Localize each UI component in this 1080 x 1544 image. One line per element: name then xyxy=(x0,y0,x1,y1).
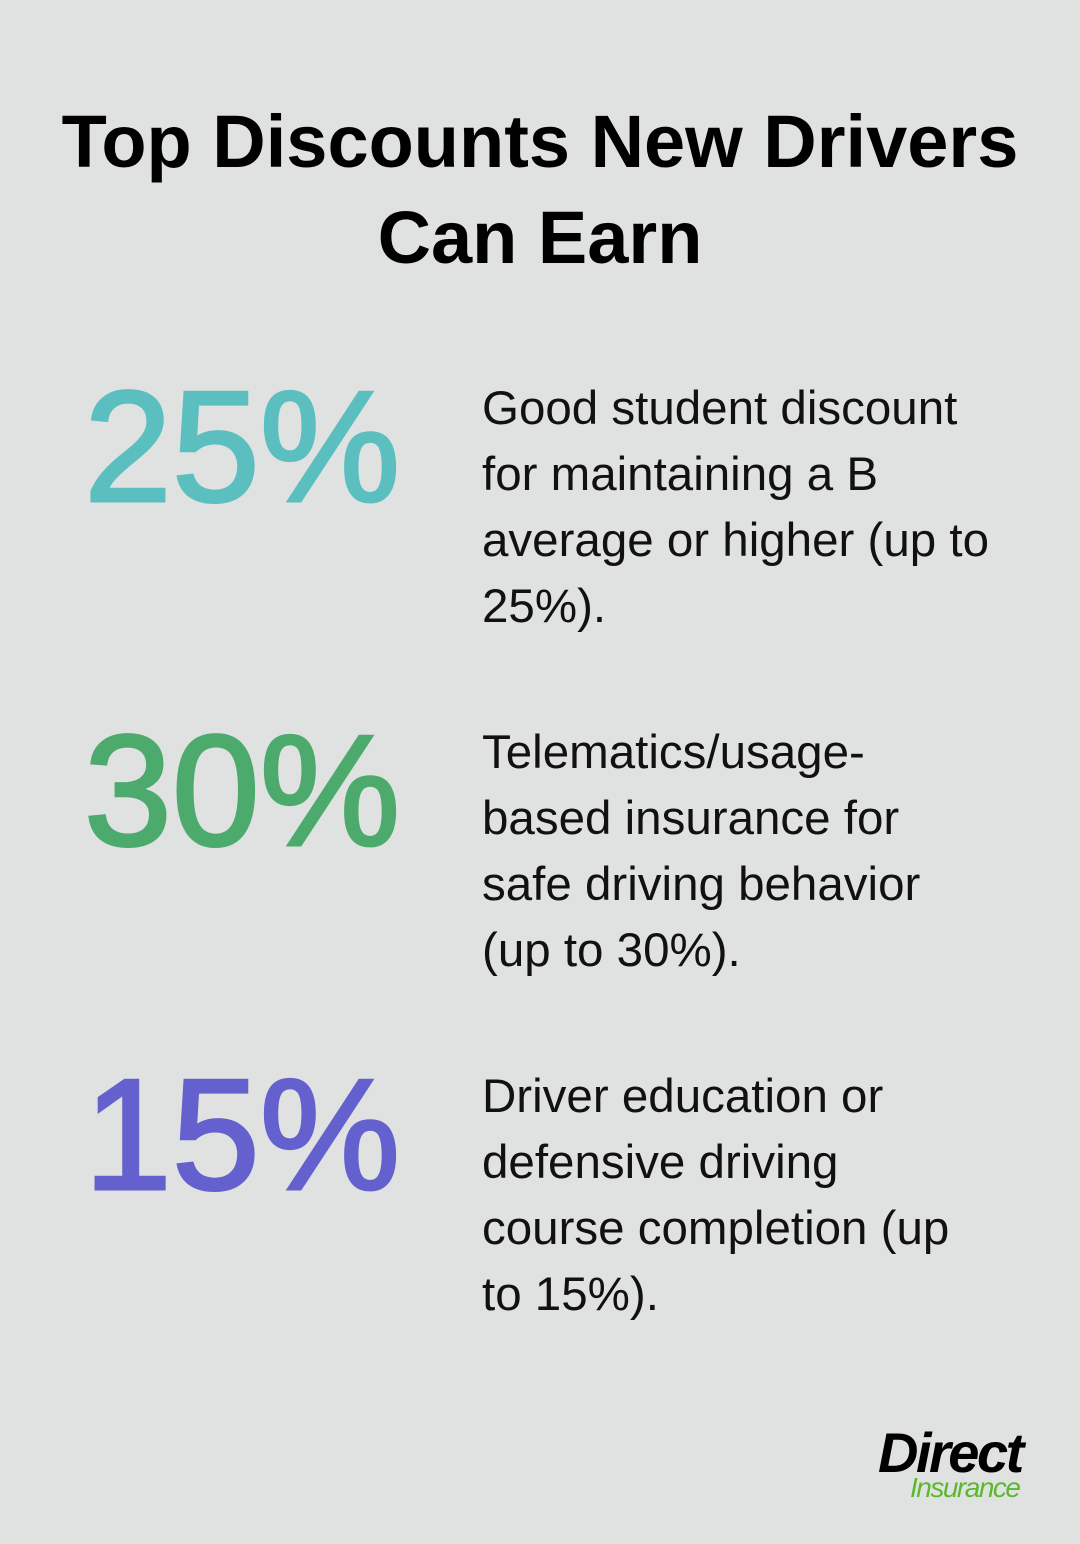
text: good student xyxy=(482,382,989,633)
text: driver education: Driver education or xyxy=(482,1070,883,1123)
text: driver education xyxy=(482,1070,949,1321)
text: good student: average or higher (up to xyxy=(482,514,989,567)
text: telematics: (up to 30%). xyxy=(482,924,741,977)
stat: 30%: 30% xyxy=(84,703,400,879)
title xyxy=(62,100,1018,279)
logo: Insurance xyxy=(910,1472,1019,1503)
title: Can Earn xyxy=(378,196,702,279)
text: telematics: based insurance for xyxy=(482,792,899,845)
title: Top Discounts New Drivers xyxy=(62,100,1018,183)
text: good student: Good student discount xyxy=(482,382,957,435)
text: driver education: course completion (up xyxy=(482,1202,949,1255)
text: telematics: safe driving behavior xyxy=(482,858,920,911)
text: telematics xyxy=(482,726,920,977)
text: good student: for maintaining a B xyxy=(482,448,878,501)
stat: 25%: 25% xyxy=(84,359,400,535)
stat: 15%: 15% xyxy=(84,1047,400,1223)
text: driver education: to 15%). xyxy=(482,1268,659,1321)
text: driver education: defensive driving xyxy=(482,1136,838,1189)
text: telematics: Telematics/usage- xyxy=(482,726,865,779)
text: good student: 25%). xyxy=(482,580,606,633)
logo: Direct xyxy=(878,1421,1022,1484)
